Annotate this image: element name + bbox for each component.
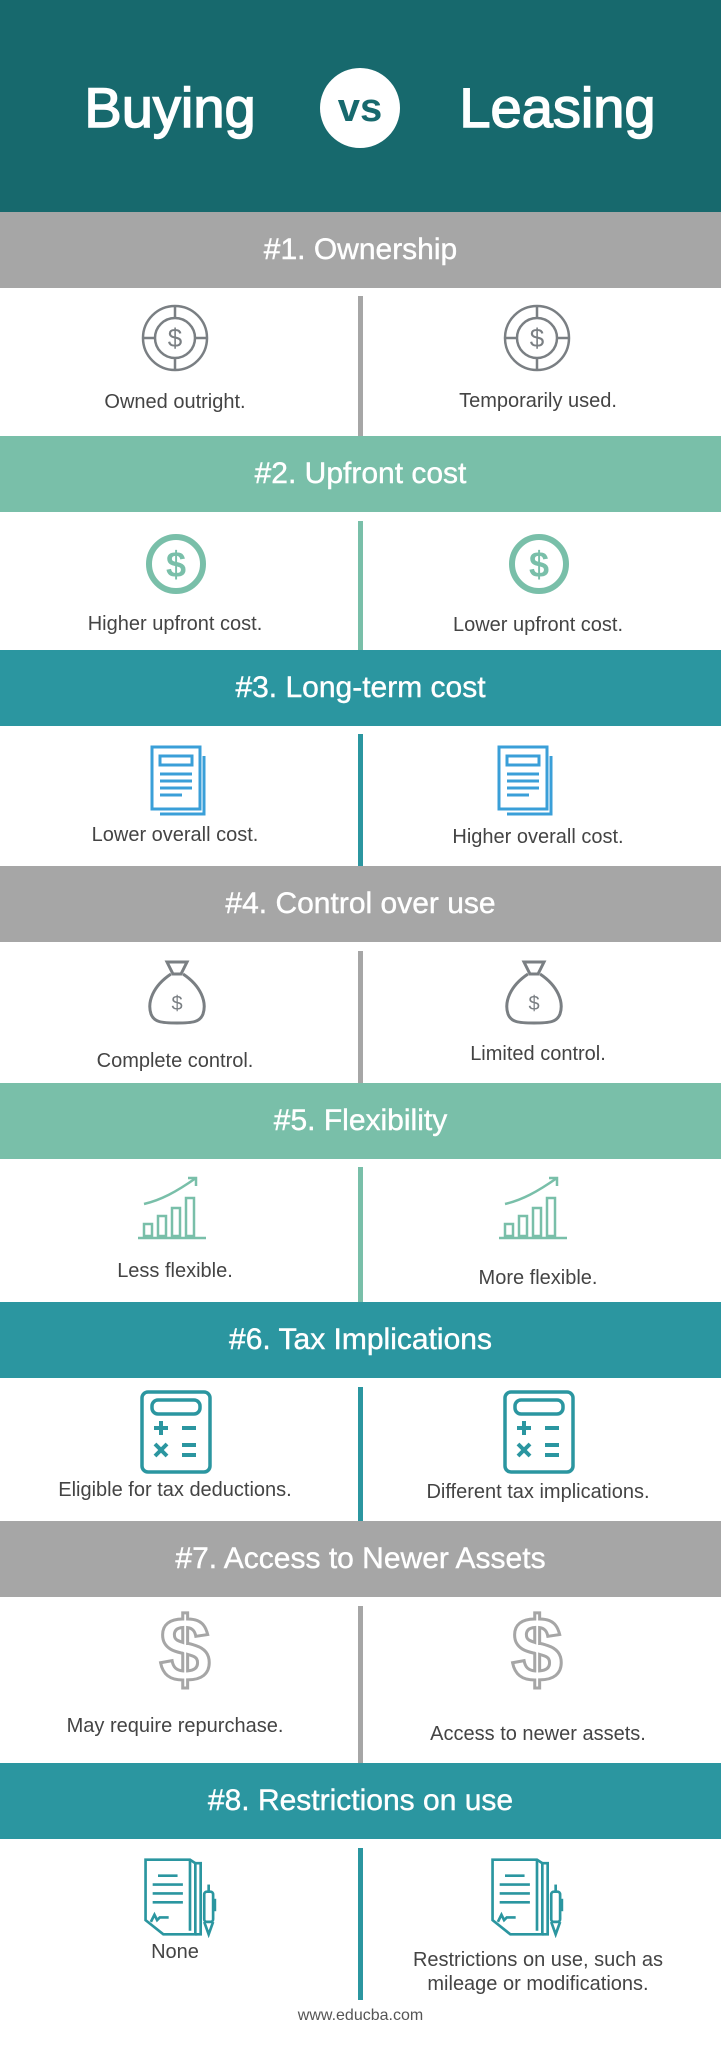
icon: contract right bbox=[491, 1858, 564, 1938]
icon: growth chart right bbox=[499, 1176, 567, 1240]
band 4: #4. Control over use bbox=[225, 887, 496, 920]
icon: coin left: $ bbox=[166, 544, 186, 585]
text: newer assets: Access to newer assets. bbox=[430, 1723, 646, 1745]
text: none: None bbox=[151, 1941, 199, 1963]
icon: contract left bbox=[144, 1858, 216, 1938]
text: owned: Owned outright. bbox=[104, 391, 246, 413]
text: restrictions: Restrictions on use, such as bbox=[413, 1949, 663, 1971]
band 6 bbox=[0, 1302, 721, 1378]
icon: money bag left bbox=[148, 960, 206, 1024]
band 7: #7. Access to Newer Assets bbox=[175, 1542, 546, 1575]
icon: document left bbox=[150, 746, 206, 816]
vs circle: vs bbox=[338, 86, 382, 130]
band 1: #1. Ownership bbox=[264, 233, 457, 266]
band 4 bbox=[0, 866, 721, 942]
icon: target dollar left bbox=[142, 304, 208, 372]
band 2 bbox=[0, 436, 721, 512]
header bbox=[0, 0, 721, 212]
icon: dollar right: $ bbox=[511, 1599, 563, 1701]
band 3: #3. Long-term cost bbox=[235, 671, 486, 704]
icon: target dollar right: $ bbox=[530, 323, 545, 353]
text: less flexible: Less flexible. bbox=[117, 1260, 233, 1282]
band 8 bbox=[0, 1763, 721, 1839]
text: lower overall: Lower overall cost. bbox=[92, 824, 258, 846]
icon: coin right bbox=[509, 534, 569, 594]
icon: target dollar left: $ bbox=[168, 323, 183, 353]
text: different: Different tax implications. bbox=[426, 1481, 650, 1503]
text: lower upfront: Lower upfront cost. bbox=[453, 614, 623, 636]
text: restrictions: mileage or modifications. bbox=[427, 1973, 649, 1995]
icon: target dollar right bbox=[504, 304, 570, 372]
band 6: #6. Tax Implications bbox=[229, 1323, 492, 1356]
icon: money bag right bbox=[505, 960, 563, 1024]
text: more flexible: More flexible. bbox=[479, 1267, 597, 1289]
icon: growth chart left bbox=[138, 1176, 206, 1240]
text: restrictions bbox=[413, 1949, 663, 1995]
icon: calculator left bbox=[140, 1390, 212, 1474]
text: complete control: Complete control. bbox=[97, 1050, 253, 1072]
band 5: #5. Flexibility bbox=[274, 1104, 447, 1137]
band 1 bbox=[0, 212, 721, 288]
band 5 bbox=[0, 1083, 721, 1159]
band 8: #8. Restrictions on use bbox=[208, 1784, 513, 1817]
text: higher overall: Higher overall cost. bbox=[452, 826, 624, 848]
text: limited control: Limited control. bbox=[470, 1043, 606, 1065]
icon: document right bbox=[498, 746, 552, 816]
icon: calculator right bbox=[503, 1390, 575, 1474]
icon: coin left bbox=[146, 534, 206, 594]
icon: dollar left: $ bbox=[159, 1599, 211, 1701]
band 3 bbox=[0, 650, 721, 726]
band 7 bbox=[0, 1521, 721, 1597]
text: eligible: Eligible for tax deductions. bbox=[58, 1479, 292, 1501]
title: Leasing: Leasing bbox=[459, 76, 656, 139]
band 2: #2. Upfront cost bbox=[255, 457, 466, 490]
text: higher upfront: Higher upfront cost. bbox=[88, 613, 262, 635]
text: repurchase: May require repurchase. bbox=[67, 1715, 283, 1737]
text: temporarily: Temporarily used. bbox=[459, 390, 617, 412]
icon: coin right: $ bbox=[529, 544, 549, 585]
title: Buying: Buying bbox=[84, 76, 256, 139]
footer: www.educba.com bbox=[298, 2007, 423, 2024]
icon: money bag right: $ bbox=[528, 993, 540, 1015]
icon: money bag left: $ bbox=[171, 993, 183, 1015]
vs circle bbox=[320, 68, 400, 148]
